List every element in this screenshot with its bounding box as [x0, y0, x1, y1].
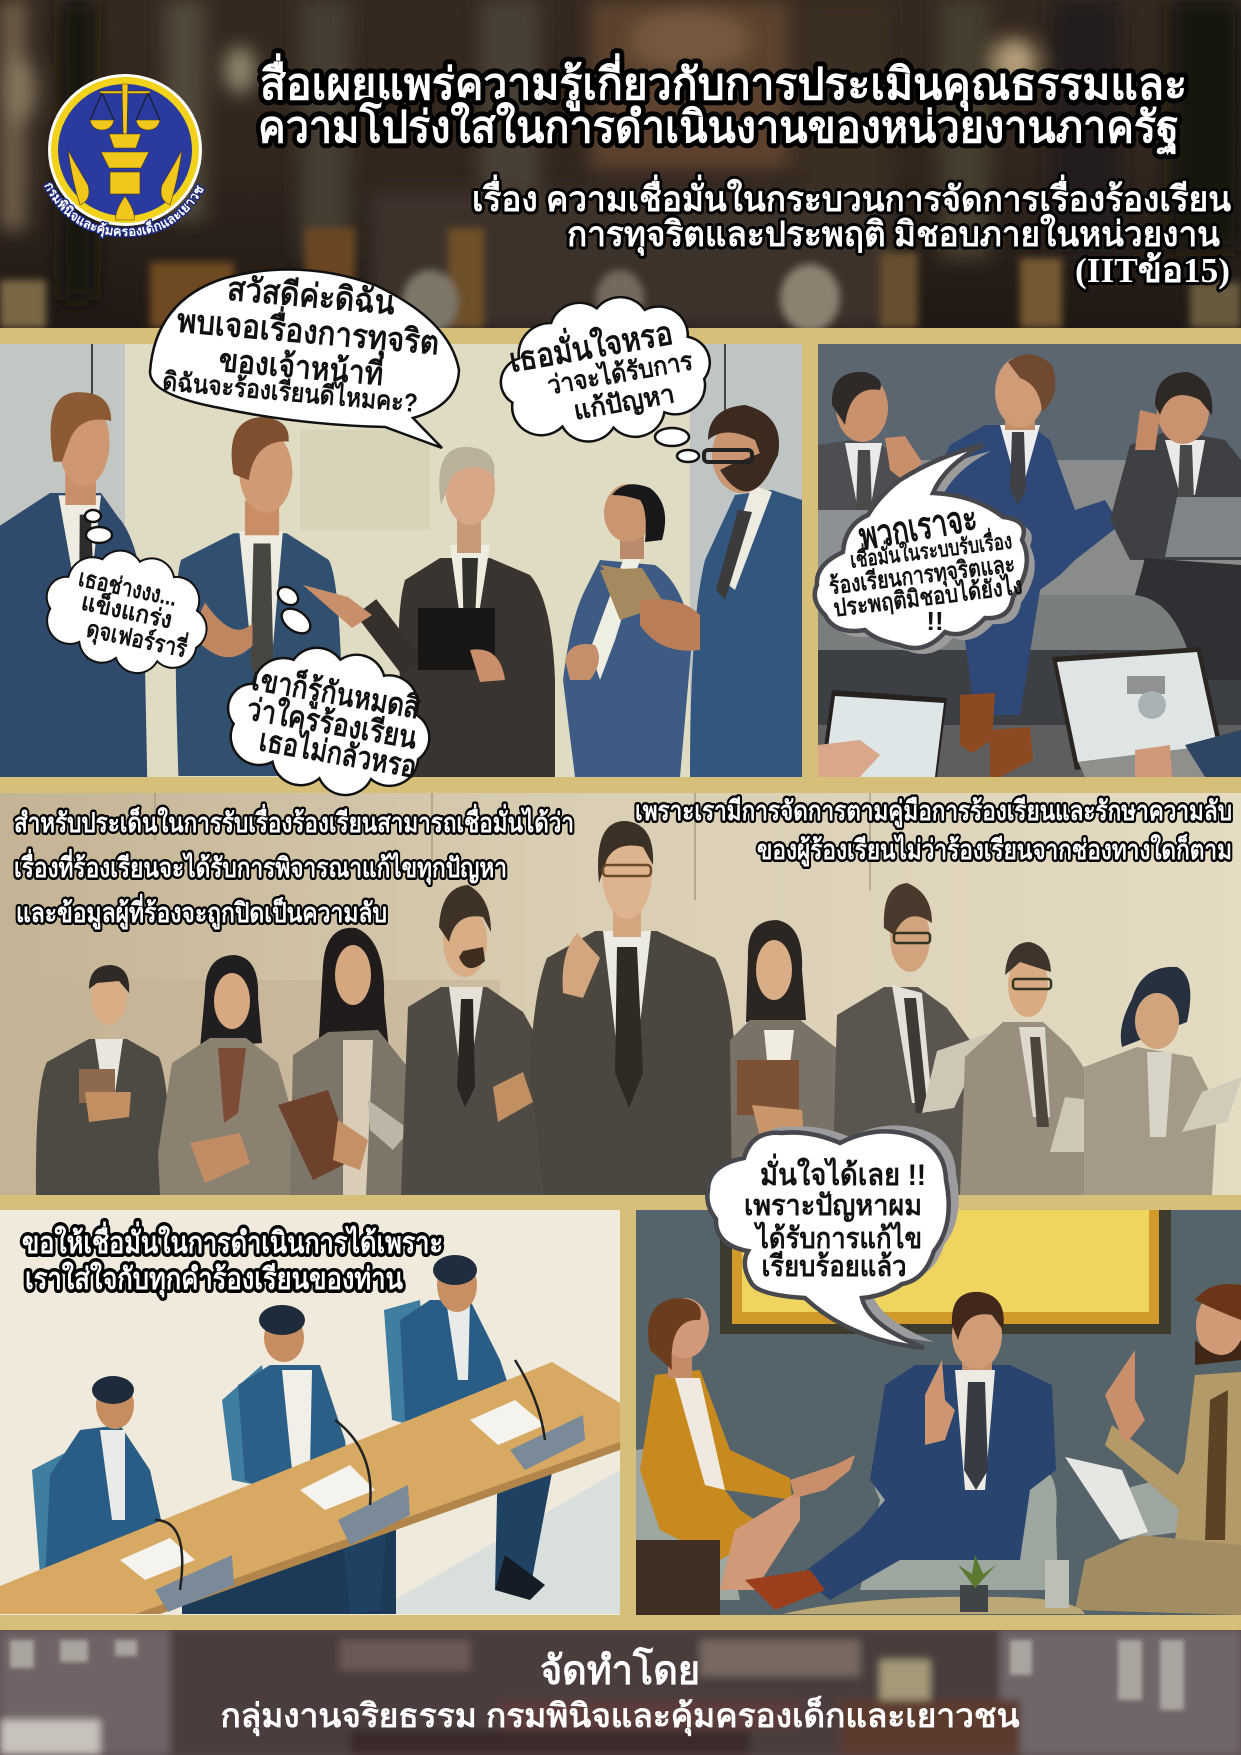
chairs: [636, 1449, 1195, 1600]
speech bubble: how can we trust: !!: [926, 606, 944, 636]
person: woman in glasses: [563, 484, 692, 777]
person: centre man on sofa: [944, 354, 1114, 777]
panel: team standing: [0, 793, 1241, 1203]
speech bubble: greeting: [150, 269, 459, 448]
speech bubble: how can we trust: พวกเราจะ: [856, 497, 980, 559]
text block: footer credit: จัดทำโดย: [540, 1647, 700, 1693]
speech bubble: how can we trust: เชื่อมั่นในระบบรับเรื่อง: [848, 524, 1013, 573]
person 2: [158, 955, 292, 1195]
thought bubble: afraid: เขาก็รู้กันหมดสิ: [249, 660, 423, 727]
thought bubble: afraid: [216, 583, 442, 808]
thought bubble: ferrari: เธอช่างงง...: [76, 565, 179, 612]
speech bubble: how can we trust: ร้องเรียนการทุจริตและ: [828, 551, 1017, 602]
panel: footer background: [0, 1630, 1241, 1755]
icon: department emblem: [42, 74, 206, 240]
person: desk middle: [222, 1305, 390, 1614]
subtitle: (IITข้อ15): [1075, 251, 1230, 290]
person: right man on sofa: [1110, 372, 1241, 680]
person 3: [278, 928, 410, 1195]
subtitle: การทุจริตและประพฤติ มิชอบภายในหน่วยงาน: [567, 213, 1220, 256]
text block: team left caption: สำหรับประเด็นในการรับเรื่องร้องเรียนสามารถเชื่อมั่นได้ว่า: [14, 803, 574, 838]
person 6: [730, 920, 836, 1159]
speech bubble: confident: มั่นใจได้เลย !!: [760, 1153, 926, 1192]
person 4: [401, 885, 548, 1195]
person: man in navy suit: [745, 1292, 1056, 1610]
yellow wall frame: [720, 1200, 1171, 1334]
conference table: [0, 1360, 620, 1614]
person: man left: [0, 392, 148, 805]
subtitle: [472, 174, 1231, 290]
thought bubble: are you sure: ว่าจะได้รับการ: [545, 344, 695, 401]
person: man with beard: [600, 405, 802, 777]
title: สื่อเผยแพร่ความรู้เกี่ยวกับการประเมินคุณธรรมและ: [260, 53, 1187, 112]
panel: complaints desk: [0, 1210, 620, 1615]
speech bubble: how can we trust: [815, 445, 1035, 654]
speech bubble: how can we trust: ประพฤติมิชอบได้ยังไง: [832, 571, 1024, 622]
text block: team right caption: [635, 796, 1232, 867]
person 1: [36, 965, 170, 1195]
speech bubble: greeting: สวัสดีค่ะดิฉัน: [226, 270, 397, 321]
person 7: [832, 883, 989, 1195]
thought bubble: ferrari: แข็งแกร่ง: [79, 587, 175, 634]
speech bubble: confident: ได้รับการแก้ไข: [753, 1221, 922, 1255]
text block: desk caption: เราใส่ใจกับทุกคำร้องเรียนของท่าน: [25, 1261, 403, 1298]
person: man in tan jacket: [1065, 1284, 1241, 1615]
panel: sofa meeting: [818, 344, 1241, 777]
text block: team left caption: และข้อมูลผู้ที่ร้องจะถูกปิดเป็นความลับ: [16, 893, 387, 930]
person: man second: [176, 417, 343, 776]
person 5: centre leader: [530, 821, 735, 1203]
title: [258, 53, 1187, 155]
coffee table and plant: [783, 1555, 1085, 1614]
thought bubble: are you sure: [491, 286, 719, 462]
person: desk far right: [384, 1255, 560, 1600]
speech bubble: greeting: พบเจอเรื่องการทุจริต: [175, 297, 441, 364]
thought bubble: are you sure: เธอมั่นใจหรอ: [506, 309, 675, 379]
person: woman in yellow jacket: [636, 1298, 855, 1615]
text block: desk caption: [22, 1221, 443, 1298]
text block: footer credit: [220, 1647, 1020, 1737]
person: desk near left: [32, 1376, 161, 1570]
thought bubble: are you sure: แก้ปัญหา: [571, 378, 677, 427]
thought bubble: afraid: ว่าใครร้องเรียน: [244, 690, 420, 756]
panel: lounge conversation: [636, 1200, 1241, 1615]
speech bubble: confident: [707, 1125, 959, 1348]
speech bubble: confident: เพราะปัญหาผม: [744, 1190, 922, 1223]
laptop front right: [1052, 647, 1241, 777]
title: ความโปร่งใสในการดำเนินงานของหน่วยงานภาครัฐ: [258, 100, 1179, 155]
thought bubble: ferrari: ดุจเฟอร์รารี่: [84, 611, 191, 665]
speech bubble: greeting: ของเจ้าหน้าที่: [217, 337, 385, 392]
panel: header background hall: [0, 0, 1241, 334]
laptop front left: [818, 690, 947, 777]
text block: desk caption: ขอให้เชื่อมั่นในการดำเนินการได้เพราะ: [22, 1221, 443, 1260]
person: left man on sofa: [818, 372, 922, 510]
text block: team left caption: เรื่องที่ร้องเรียนจะได้รับการพิจารณาแก้ไขทุกปัญหา: [14, 848, 507, 885]
thought bubble: ferrari: [33, 510, 221, 688]
panel: office conversation: [0, 344, 802, 805]
person 9: [1084, 967, 1241, 1195]
person 8: [960, 942, 1084, 1195]
person: woman with clipboard: [303, 447, 555, 777]
thought bubble: afraid: เธอไม่กลัวหรอ: [257, 721, 419, 785]
speech bubble: confident: เรียบร้อยแล้ว: [762, 1251, 906, 1283]
speech bubble: greeting: ดิฉันจะร้องเรียนดีไหมคะ?: [161, 365, 419, 418]
text block: footer credit: กลุ่มงานจริยธรรม กรมพินิจและคุ้มครองเด็กและเยาวชน: [220, 1695, 1020, 1737]
text block: team left caption: [14, 803, 574, 930]
